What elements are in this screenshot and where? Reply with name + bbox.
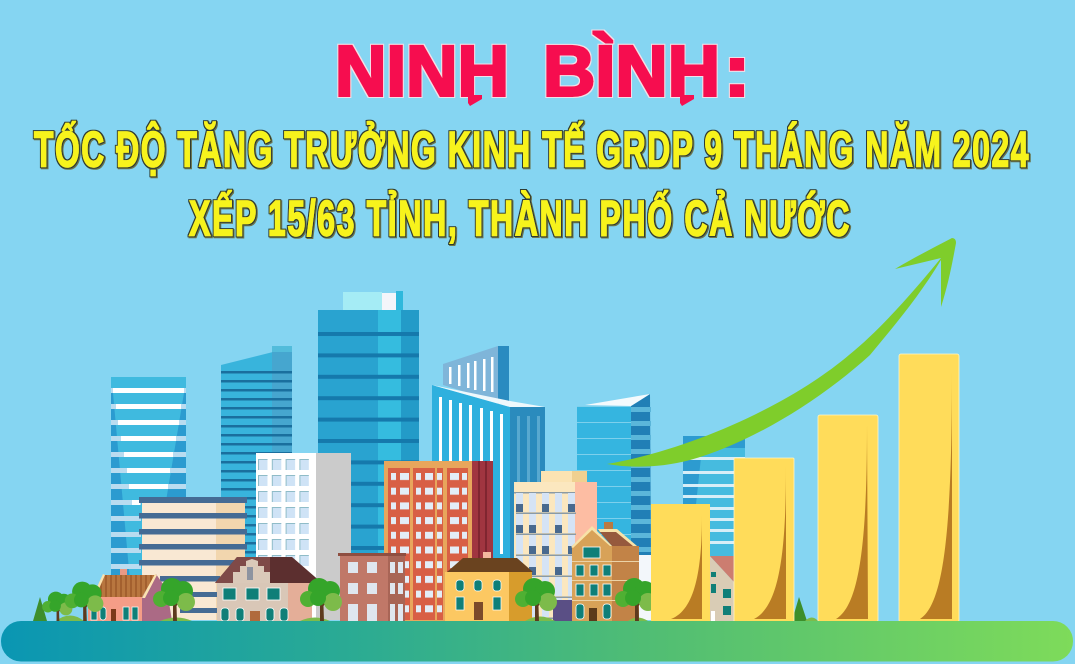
bar 1 [651,504,710,622]
title: Ninh Bình: : [724,32,750,112]
trees [33,578,818,623]
building: beige house behind bars [710,556,734,621]
building: beige banded [139,497,247,620]
building: tan townhouse [571,522,653,621]
building: yellow house [445,552,533,621]
arrow: growth trend [607,238,956,467]
bar 4 [899,354,959,622]
building: blue tower with white stripes [432,346,545,600]
building: striped tower left [111,377,186,603]
building: salmon cottage [88,569,172,621]
building: cream apartment [514,471,597,621]
building: far tower behind bars [683,436,745,561]
title: Ninh Bình [335,32,750,112]
building: slanted tower [221,346,292,601]
building: white office [256,453,351,620]
building: right glass tower [577,394,651,561]
building: orange tower [384,461,493,621]
title: Ninh Bình: BÌNH [543,32,720,112]
building: brick apartment [338,553,406,621]
bar 3 [818,415,878,622]
city skyline illustration [33,291,818,623]
building: grey gabled house [215,557,322,621]
title: Ninh Bình: NINH [335,32,509,112]
ground strip [1,621,1073,662]
building: tall blue tower [318,291,419,622]
bar 2 [734,458,794,622]
